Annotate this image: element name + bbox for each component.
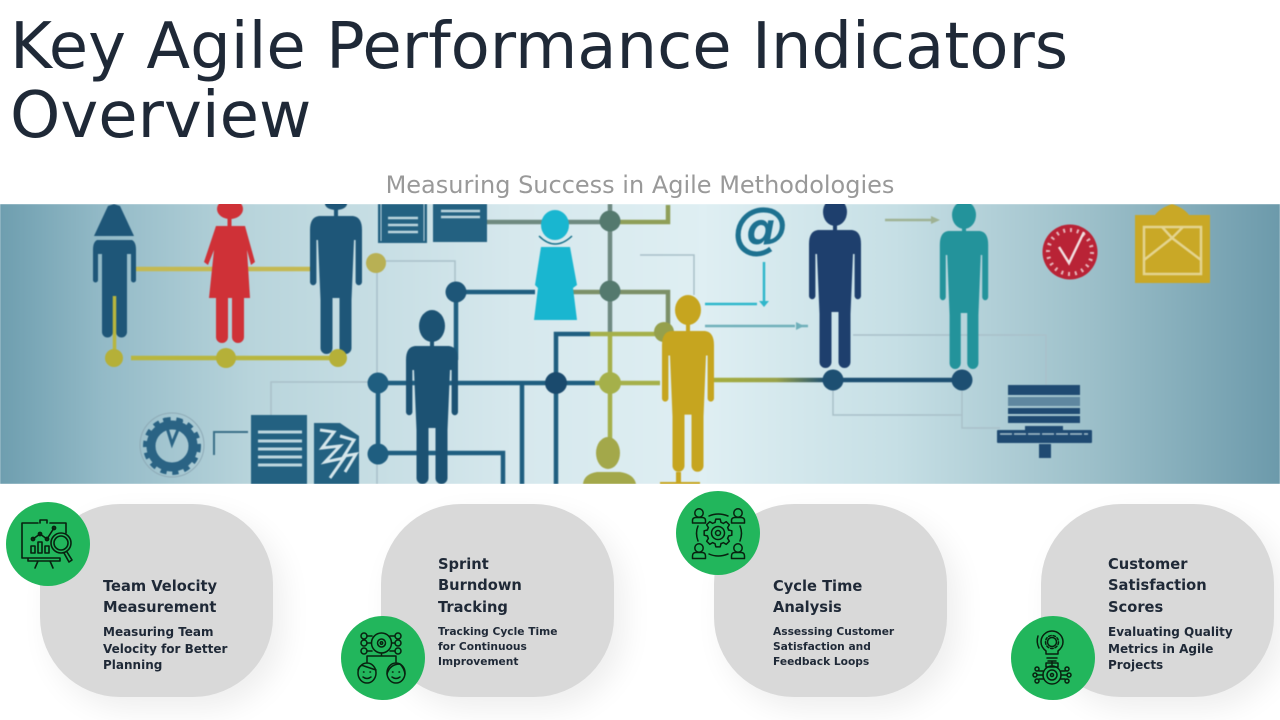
red clock bbox=[1042, 224, 1098, 280]
panel: Cycle Time bbox=[676, 491, 957, 709]
heading: Team Velocity: Team Velocity bbox=[103, 578, 217, 594]
panel: Customer Satisfaction bbox=[1011, 504, 1280, 709]
thin grey connectors bbox=[271, 255, 1046, 484]
panel: Team Velocity bbox=[6, 502, 283, 709]
text: Cycle Time description bbox=[773, 625, 894, 668]
heading: Customer Satisfaction: Scores bbox=[1108, 598, 1163, 616]
text: Team Velocity description: Measuring Team bbox=[103, 625, 214, 639]
gear clock icon bbox=[140, 413, 248, 477]
figure: gold man bbox=[660, 295, 714, 484]
figure: dark man centre bbox=[406, 310, 458, 484]
text: Team Velocity description: Velocity for Better bbox=[103, 642, 227, 656]
heading: Team Velocity bbox=[103, 578, 217, 616]
figure: cyan woman bbox=[534, 210, 577, 320]
icon: gear and four people bbox=[676, 491, 760, 575]
figure: red woman bbox=[204, 199, 255, 343]
heading: Sprint Burndown: Tracking bbox=[438, 598, 508, 616]
heading: Sprint Burndown bbox=[438, 556, 522, 616]
text: Sprint Burndown description: Improvement bbox=[438, 655, 518, 668]
hero illustration: people network bbox=[0, 204, 1280, 484]
heading: Sprint Burndown: Sprint bbox=[438, 556, 489, 572]
arrows bbox=[705, 216, 940, 330]
olive connectors left bbox=[131, 269, 338, 358]
icon: light bulb and network bbox=[1011, 616, 1095, 700]
panel: Sprint Burndown bbox=[341, 504, 624, 709]
text: Team Velocity description: Planning bbox=[103, 658, 162, 672]
text: Cycle Time description: Assessing Customer bbox=[773, 625, 894, 638]
documents top bbox=[378, 204, 487, 243]
gold clipboard bbox=[1135, 204, 1210, 283]
title: Overview bbox=[10, 79, 311, 153]
text: Sprint Burndown description bbox=[438, 625, 557, 668]
heading: Customer Satisfaction: Customer bbox=[1108, 556, 1187, 572]
network lines bbox=[378, 204, 962, 484]
text: Customer Satisfaction description bbox=[1108, 625, 1233, 672]
heading: Customer Satisfaction: Satisfaction bbox=[1108, 577, 1207, 594]
heading: Sprint Burndown: Burndown bbox=[438, 577, 522, 594]
text: Customer Satisfaction description: Metrics in Agile bbox=[1108, 642, 1213, 656]
text: Customer Satisfaction description: Evaluating Quality bbox=[1108, 625, 1233, 639]
figure: olive person bottom bbox=[583, 437, 636, 484]
text: Sprint Burndown description: for Continuous bbox=[438, 640, 527, 653]
heading: Cycle Time: Cycle Time bbox=[773, 578, 862, 594]
network nodes bbox=[366, 210, 972, 464]
olive nodes row bbox=[105, 296, 347, 368]
subtitle: Measuring Success in Agile Methodologies bbox=[386, 171, 894, 199]
text: Cycle Time description: Feedback Loops bbox=[773, 655, 869, 668]
figure: hooded person bbox=[93, 204, 136, 338]
figure: teal man bbox=[940, 201, 988, 369]
text: Customer Satisfaction description: Projects bbox=[1108, 658, 1163, 672]
heading: Cycle Time bbox=[773, 578, 862, 616]
title: Key Agile Performance Indicators bbox=[10, 10, 1068, 84]
icon: presentation board with magnifier bbox=[6, 502, 90, 586]
icon: network and two faces bbox=[341, 616, 425, 700]
text: Team Velocity description bbox=[103, 625, 228, 672]
documents bottom bbox=[251, 415, 359, 484]
text: Cycle Time description: Satisfaction and bbox=[773, 640, 871, 653]
heading: Team Velocity: Measurement bbox=[103, 599, 216, 616]
computer bbox=[997, 385, 1092, 458]
figure: navy man bbox=[809, 198, 861, 368]
text: Sprint Burndown description: Tracking Cycle Time bbox=[438, 625, 557, 638]
figure: blue man bbox=[310, 198, 362, 354]
heading: Cycle Time: Analysis bbox=[773, 599, 842, 616]
heading: Customer Satisfaction bbox=[1108, 556, 1207, 616]
title bbox=[10, 10, 1068, 153]
